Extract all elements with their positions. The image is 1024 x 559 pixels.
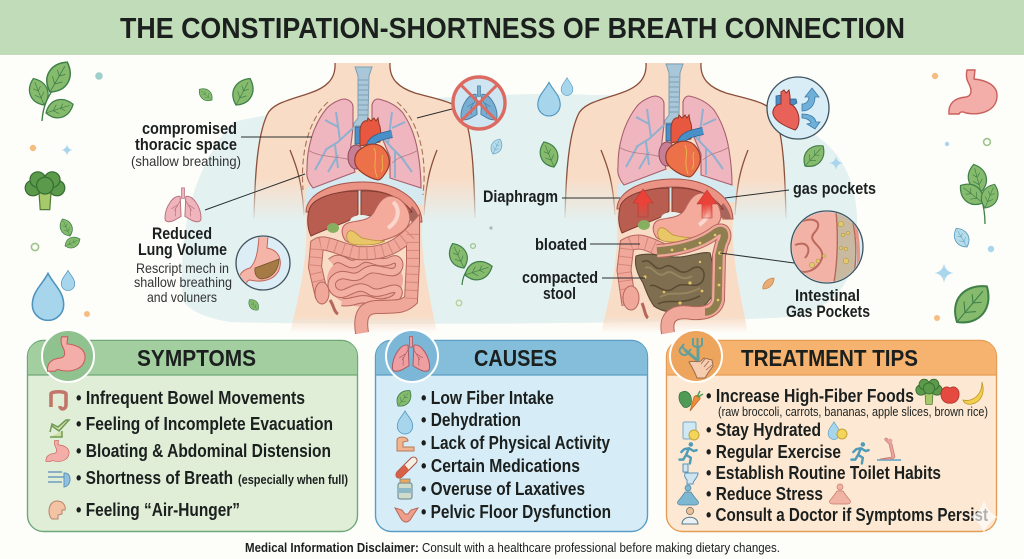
icon: leafy branch xyxy=(25,57,77,121)
anatomy figure: bloated abdomen xyxy=(565,63,786,333)
label: compromised thoracic space: thoracic space xyxy=(135,136,237,154)
list text: • Lack of Physical Activity xyxy=(421,432,611,453)
watermark sparkle xyxy=(970,500,998,534)
list text: • Infrequent Bowel Movements xyxy=(76,387,305,408)
list text: • Pelvic Floor Dysfunction xyxy=(421,501,611,522)
inline food and activity icons xyxy=(828,379,983,504)
label: compacted stool xyxy=(522,269,645,303)
label: compromised thoracic space xyxy=(131,120,312,169)
label: reduced lung volume xyxy=(134,225,232,305)
icon: leafy branch xyxy=(955,162,1002,224)
left decoration column xyxy=(25,57,103,320)
colon xyxy=(315,231,413,333)
list text: • Low Fiber Intake xyxy=(421,387,554,408)
list text: • Stay Hydrated xyxy=(706,419,821,440)
label: compromised thoracic space: (shallow breathing) xyxy=(131,153,241,169)
list icons xyxy=(393,387,418,522)
list text: • Reduce Stress xyxy=(706,483,823,504)
icon: lungs badge xyxy=(386,330,438,382)
list text: • Shortness of Breath xyxy=(76,467,233,488)
list text: • Certain Medications xyxy=(421,455,580,476)
list icons xyxy=(46,392,70,519)
list text xyxy=(706,385,988,525)
list text: • Increase High-Fiber Foods xyxy=(706,385,914,406)
list text: • Feeling of Incomplete Evacuation xyxy=(76,413,333,434)
dashed rib outline xyxy=(302,102,424,195)
teal backdrop xyxy=(182,94,857,324)
anatomy figure: compromised thoracic space xyxy=(254,63,475,333)
heading: SYMPTOMS xyxy=(137,345,256,371)
right decoration column xyxy=(932,70,1002,331)
list text: • Overuse of Laxatives xyxy=(421,478,585,499)
transverse and descending colon with stool xyxy=(657,230,724,333)
list text xyxy=(421,387,611,522)
icon: small leaves xyxy=(57,217,82,251)
panel: causes xyxy=(376,330,648,532)
label: bloated: bloated xyxy=(535,236,587,254)
label: gas pockets xyxy=(725,180,876,198)
scattered leaves centre xyxy=(196,74,843,313)
label: reduced lung volume: and voluners xyxy=(147,289,217,305)
label: reduced lung volume: shallow breathing xyxy=(134,274,232,290)
ascending colon xyxy=(623,242,662,318)
list text: • Establish Routine Toilet Habits xyxy=(706,462,941,483)
label: reduced lung volume: Reduced xyxy=(152,225,212,243)
icon: stomach xyxy=(949,70,997,114)
icon: blocked lungs xyxy=(453,77,505,129)
list text: • Regular Exercise xyxy=(706,441,841,462)
label: intestinal gas pockets xyxy=(786,287,870,321)
label: compromised thoracic space: compromised xyxy=(142,120,237,138)
icon: water drops xyxy=(538,78,573,116)
stomach and pancreas xyxy=(327,196,410,245)
heading: CAUSES xyxy=(474,345,557,371)
icon: intestinal gas pockets inset xyxy=(790,210,863,284)
panel: symptoms xyxy=(28,330,358,532)
label: reduced lung volume: Lung Volume xyxy=(138,241,227,259)
list text xyxy=(76,387,348,520)
icon: small lungs xyxy=(165,188,201,222)
label: diaphragm: Diaphragm xyxy=(483,188,558,206)
disclaimer: Medical Information Disclaimer: Consult with a healthcare professional before making dietary changes. xyxy=(245,541,780,555)
list text: • Feeling “Air-Hunger” xyxy=(76,499,240,520)
icon: broccoli xyxy=(25,172,65,210)
icon: heart with arrows xyxy=(767,77,829,139)
label: gas pockets: gas pockets xyxy=(793,180,876,198)
label: reduced lung volume: Rescript mech in xyxy=(136,260,229,276)
icon: hand with forks badge xyxy=(670,330,722,382)
label: diaphragm xyxy=(483,188,620,206)
red up arrows xyxy=(633,189,717,218)
icon: large leaf xyxy=(946,277,998,331)
compacted stool mass xyxy=(635,253,714,313)
icon: water drops xyxy=(32,270,75,320)
icon: sprig xyxy=(445,240,495,285)
small intestine xyxy=(327,253,403,307)
list text: • Bloating & Abdominal Distension xyxy=(76,440,331,461)
label: intestinal gas pockets: Intestinal xyxy=(795,287,860,305)
label: compacted stool: compacted xyxy=(522,269,598,287)
stomach xyxy=(638,193,721,242)
heading: TREATMENT TIPS xyxy=(741,345,918,371)
icon: stomach badge xyxy=(42,330,94,382)
gas bubbles xyxy=(671,234,722,301)
title banner: THE CONSTIPATION-SHORTNESS OF BREATH CONNECTION xyxy=(120,13,905,45)
list icons xyxy=(678,391,703,524)
list text: (especially when full) xyxy=(238,473,348,487)
list text: (raw broccoli, carrots, bananas, apple slices, brown rice) xyxy=(718,405,988,419)
label: intestinal gas pockets: Gas Pockets xyxy=(786,303,870,321)
icon: stomach with stool inset xyxy=(236,236,290,292)
title banner xyxy=(0,0,1024,55)
label: compacted stool: stool xyxy=(543,285,576,303)
panel: treatment tips xyxy=(666,330,998,534)
list text: • Dehydration xyxy=(421,409,521,430)
label: bloated xyxy=(535,236,640,254)
